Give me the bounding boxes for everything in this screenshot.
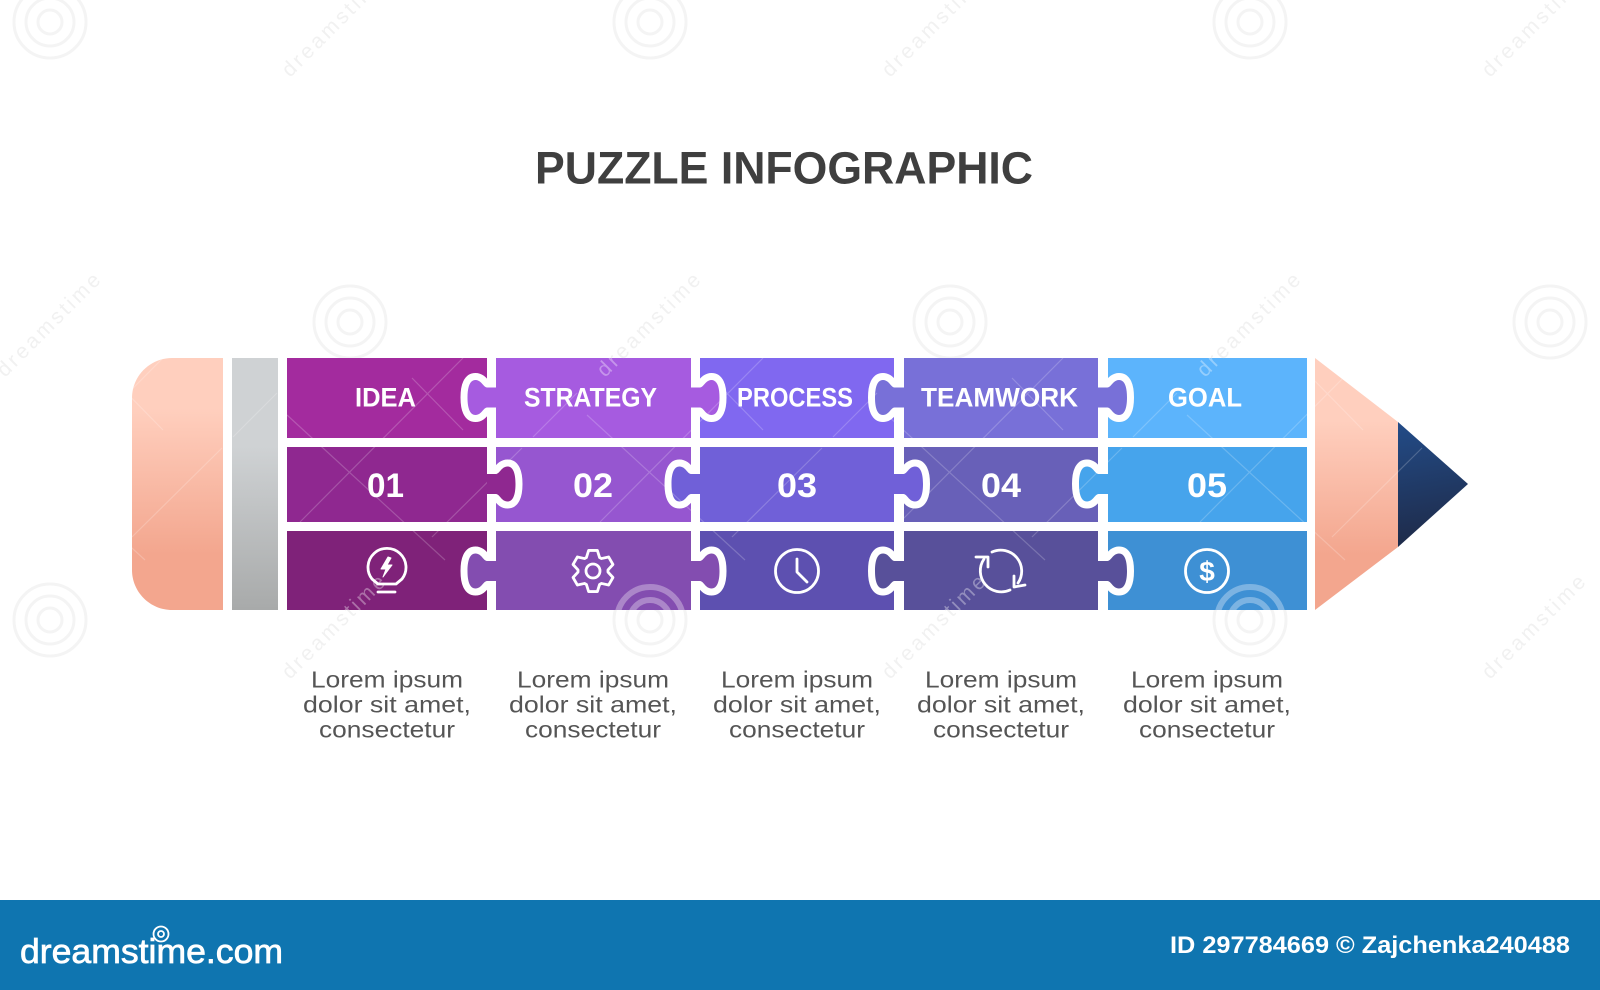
puzzle tabs <box>468 380 1127 588</box>
piece column 3 <box>700 358 894 610</box>
watermark pattern on white: dreamstime <box>1477 568 1592 684</box>
icon: clock <box>776 550 818 592</box>
watermark pattern on white: dreamstime <box>1192 266 1307 382</box>
wood cone <box>1315 358 1398 610</box>
piece column 1 <box>287 358 487 610</box>
step labels: TEAMWORK <box>921 382 1078 412</box>
step labels: GOAL <box>1168 382 1242 412</box>
step numbers: 05 <box>1187 467 1227 505</box>
watermark overlay on pencil: dreamstime <box>592 266 707 382</box>
step labels: PROCESS <box>737 382 853 412</box>
caption 2: consectetur <box>525 716 661 742</box>
caption 4: Lorem ipsum <box>925 666 1077 692</box>
watermark overlay on pencil: dreamstime <box>877 568 992 684</box>
icon: gear <box>573 550 613 592</box>
step numbers: 03 <box>777 467 817 505</box>
caption 2: Lorem ipsum <box>517 666 669 692</box>
caption 4: dolor sit amet, <box>917 692 1085 718</box>
watermark overlay on pencil: dreamstime <box>277 568 392 684</box>
footer bar <box>0 900 1600 990</box>
step numbers: 04 <box>981 467 1021 505</box>
footer logo: dreamstime.com <box>20 933 283 971</box>
piece column 4 <box>904 358 1098 610</box>
caption 5: Lorem ipsum <box>1131 666 1283 692</box>
caption 2: dolor sit amet, <box>509 692 677 718</box>
footer image id and credit: ID 297784669 © Zajchenka240488 <box>1170 932 1570 959</box>
step labels: STRATEGY <box>524 382 657 412</box>
pencil eraser <box>132 358 223 610</box>
title: PUZZLE INFOGRAPHIC <box>535 142 1033 194</box>
step numbers <box>367 467 1227 505</box>
caption 1: consectetur <box>319 716 455 742</box>
watermark pattern on white <box>0 0 1592 684</box>
caption 3: dolor sit amet, <box>713 692 881 718</box>
caption 3: consectetur <box>729 716 865 742</box>
icon: light bulb <box>368 548 406 592</box>
watermark pattern on white: dreamstime <box>877 568 992 684</box>
caption 1: Lorem ipsum <box>311 666 463 692</box>
watermark overlay on pencil: dreamstime <box>1192 266 1307 382</box>
caption 3: Lorem ipsum <box>721 666 873 692</box>
caption 5: consectetur <box>1139 716 1275 742</box>
piece column 2 <box>496 358 691 610</box>
piece column 5 <box>1108 358 1307 610</box>
graphite lead <box>1398 422 1468 547</box>
pencil tip <box>1315 358 1468 610</box>
caption 1: dolor sit amet, <box>303 692 471 718</box>
step numbers: 02 <box>573 467 613 505</box>
watermark overlay on pencil <box>0 266 1600 684</box>
caption 5: dolor sit amet, <box>1123 692 1291 718</box>
icon: dollar coin <box>1186 550 1228 592</box>
icon: dollar coin: $ <box>1199 556 1215 587</box>
watermark pattern on white: dreamstime <box>277 568 392 684</box>
icon: cycle arrows <box>976 550 1025 592</box>
pencil ferrule <box>232 358 278 610</box>
puzzle body <box>287 358 1307 610</box>
watermark pattern on white: dreamstime <box>592 266 707 382</box>
caption 4: consectetur <box>933 716 1069 742</box>
step numbers: 01 <box>367 467 404 505</box>
step labels <box>355 382 1242 412</box>
step labels: IDEA <box>355 382 416 412</box>
